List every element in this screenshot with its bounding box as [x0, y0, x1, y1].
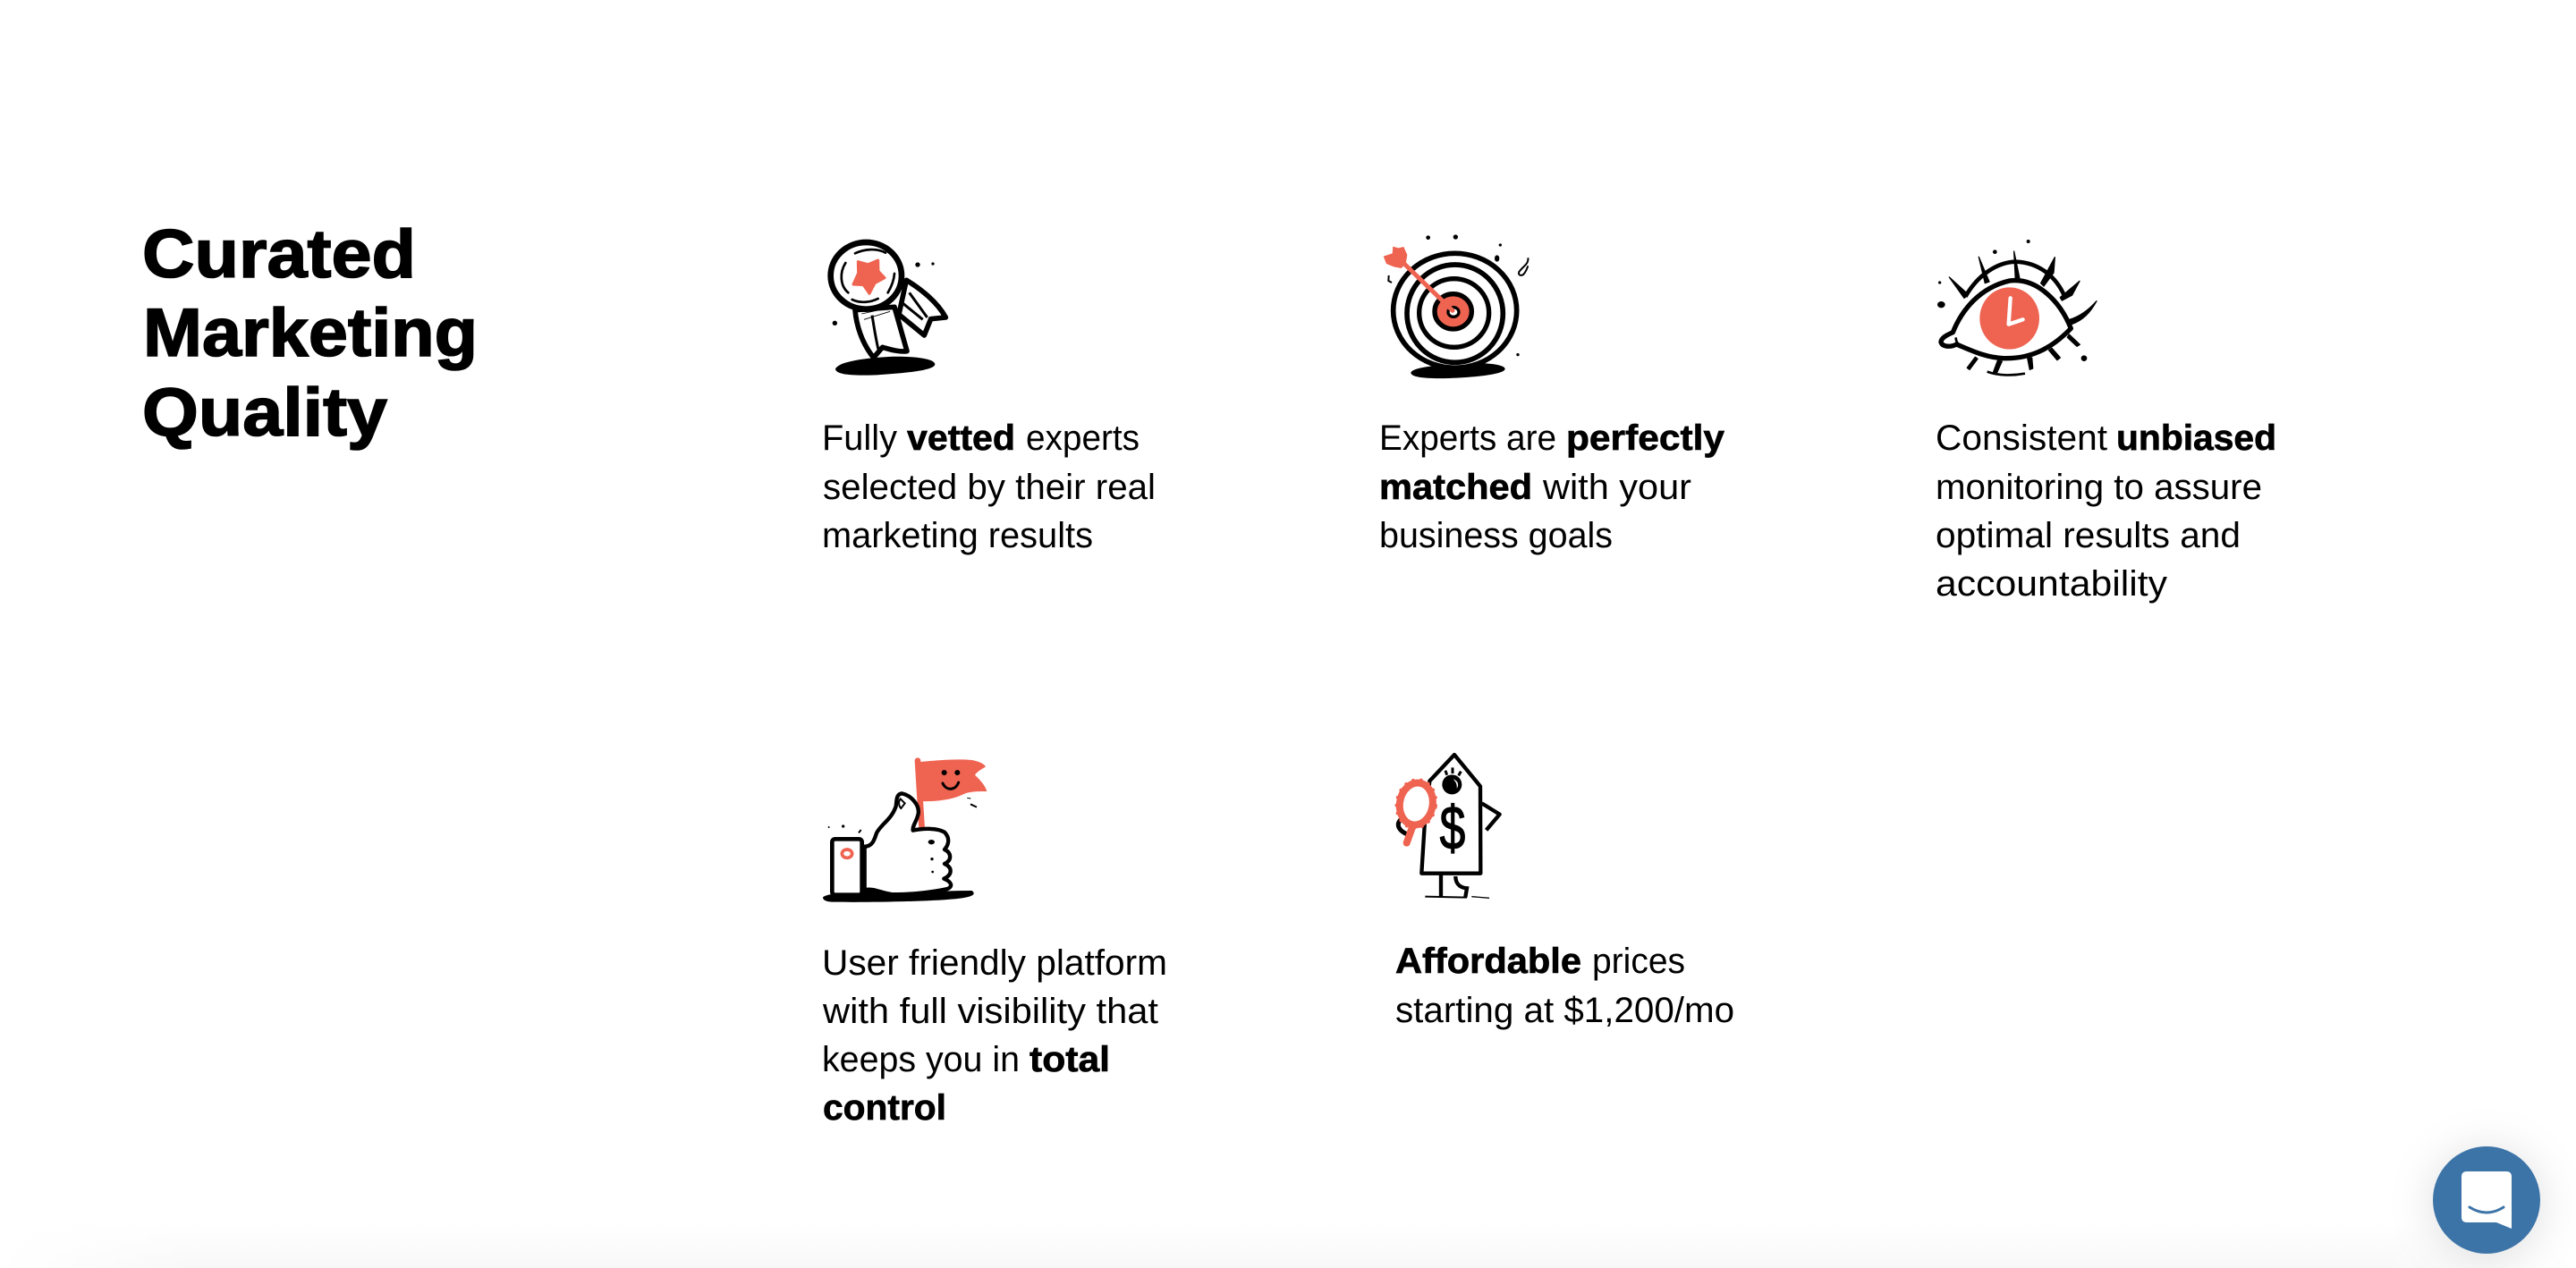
panel: affordable prices	[1393, 755, 1734, 1030]
icon: price tag with mirror	[1393, 755, 1500, 898]
panel: unbiased monitoring	[1936, 240, 2276, 604]
text: fully vetted experts: vetted	[907, 418, 1015, 458]
icon: eye with clock	[1937, 240, 2097, 375]
panel: total control	[822, 759, 1167, 1128]
text: unbiased monitoring: unbiased	[2116, 418, 2276, 458]
icon: target with dart	[1384, 234, 1528, 378]
text: fully vetted experts: experts	[1026, 418, 1140, 458]
text: affordable prices	[1395, 942, 1734, 1030]
text: perfectly matched: business goals	[1379, 516, 1613, 555]
chat button	[2433, 1146, 2540, 1254]
text: unbiased monitoring	[1936, 418, 2276, 604]
text: fully vetted experts: Fully	[822, 418, 897, 458]
text: unbiased monitoring: accountability	[1936, 564, 2167, 604]
icon: thumbs up with flag	[823, 759, 987, 902]
title: Marketing	[143, 295, 478, 371]
title	[142, 216, 478, 451]
title: Quality	[142, 375, 387, 451]
panel: fully vetted experts	[822, 242, 1156, 555]
text: perfectly matched	[1379, 418, 1725, 555]
text: perfectly matched: with your	[1542, 468, 1691, 507]
text: total control: total	[1030, 1040, 1110, 1079]
text: perfectly matched: Experts are	[1379, 418, 1556, 458]
text: fully vetted experts: marketing results	[822, 516, 1093, 555]
text: total control: control	[823, 1088, 946, 1128]
text: affordable prices: Affordable	[1395, 942, 1581, 981]
icon: medal with star	[831, 242, 945, 376]
text: unbiased monitoring: optimal results and	[1936, 516, 2241, 555]
text: affordable prices: prices	[1592, 942, 1685, 981]
text: fully vetted experts: selected by their real	[823, 468, 1156, 507]
panel: perfectly matched	[1379, 234, 1725, 555]
text: perfectly matched: matched	[1379, 468, 1532, 507]
text: unbiased monitoring: monitoring to assure	[1936, 468, 2262, 507]
text: total control: with full visibility that	[822, 992, 1158, 1031]
text: fully vetted experts	[822, 418, 1156, 555]
text: unbiased monitoring: Consistent	[1936, 418, 2107, 458]
icon: price tag with mirror: $	[1440, 794, 1465, 862]
title: Curated	[142, 216, 416, 292]
text: affordable prices: starting at $1,200/mo	[1395, 991, 1734, 1030]
text: total control: User friendly platform	[822, 943, 1167, 983]
text: total control: keeps you in	[822, 1040, 1020, 1079]
text: total control	[822, 943, 1167, 1128]
text: perfectly matched: perfectly	[1566, 418, 1725, 458]
